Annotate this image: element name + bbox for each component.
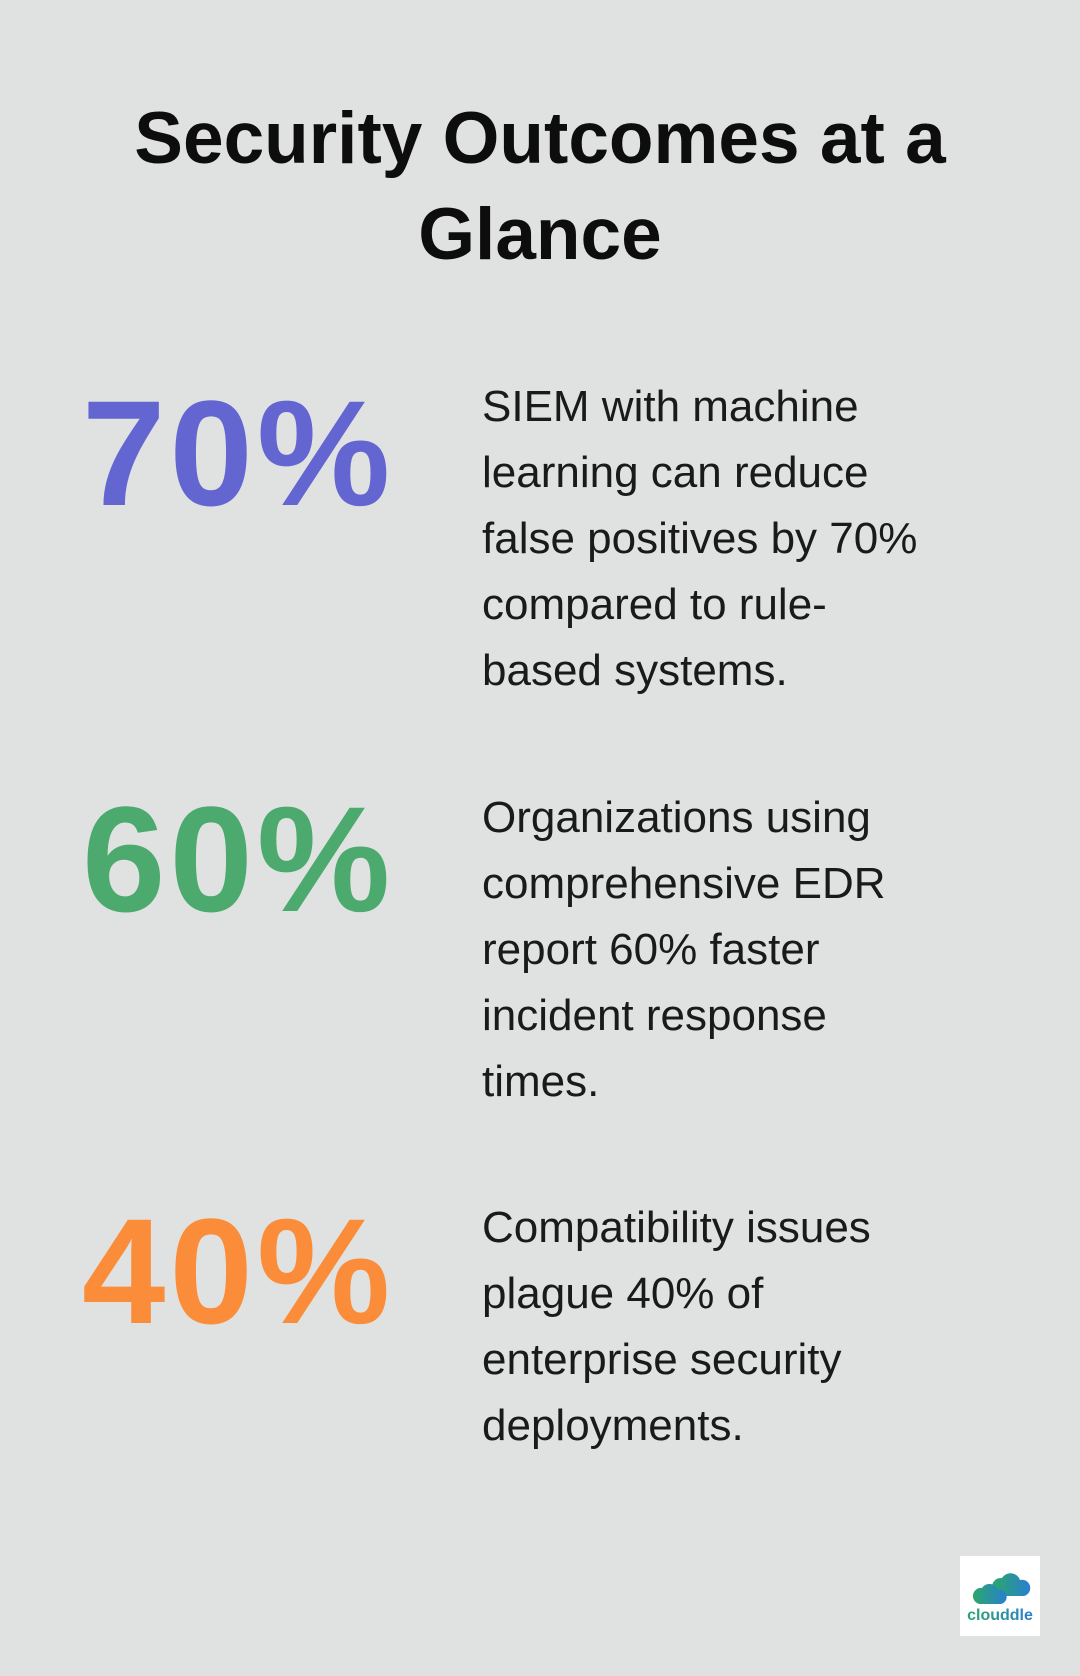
text: 40% description: Compatibility issues <box>482 1203 871 1252</box>
stat: 60%: 60% <box>82 775 394 943</box>
text: 40% description: enterprise security <box>482 1335 841 1384</box>
text: 70% description: compared to rule- <box>482 580 827 629</box>
stat: 70%: 70% <box>82 369 394 537</box>
text: 60% description: incident response <box>482 991 827 1040</box>
text: 60% description: Organizations using <box>482 793 871 842</box>
text: 40% description: deployments. <box>482 1401 744 1450</box>
title: Glance <box>418 194 662 275</box>
title: Security Outcomes at a <box>134 98 946 179</box>
text: 70% description <box>482 382 917 695</box>
logo: clouddle <box>967 1607 1033 1624</box>
text: 60% description: report 60% faster <box>482 925 820 974</box>
text: 60% description: comprehensive EDR <box>482 859 886 908</box>
text: 70% description: learning can reduce <box>482 448 868 497</box>
text: 70% description: SIEM with machine <box>482 382 859 431</box>
text: 70% description: based systems. <box>482 646 788 695</box>
stat: 40%: 40% <box>82 1187 394 1355</box>
logo <box>960 1556 1040 1636</box>
text: 60% description <box>482 793 886 1106</box>
text: 60% description: times. <box>482 1057 599 1106</box>
text: 70% description: false positives by 70% <box>482 514 917 563</box>
text: 40% description <box>482 1203 871 1450</box>
title <box>134 98 946 275</box>
text: 40% description: plague 40% of <box>482 1269 763 1318</box>
